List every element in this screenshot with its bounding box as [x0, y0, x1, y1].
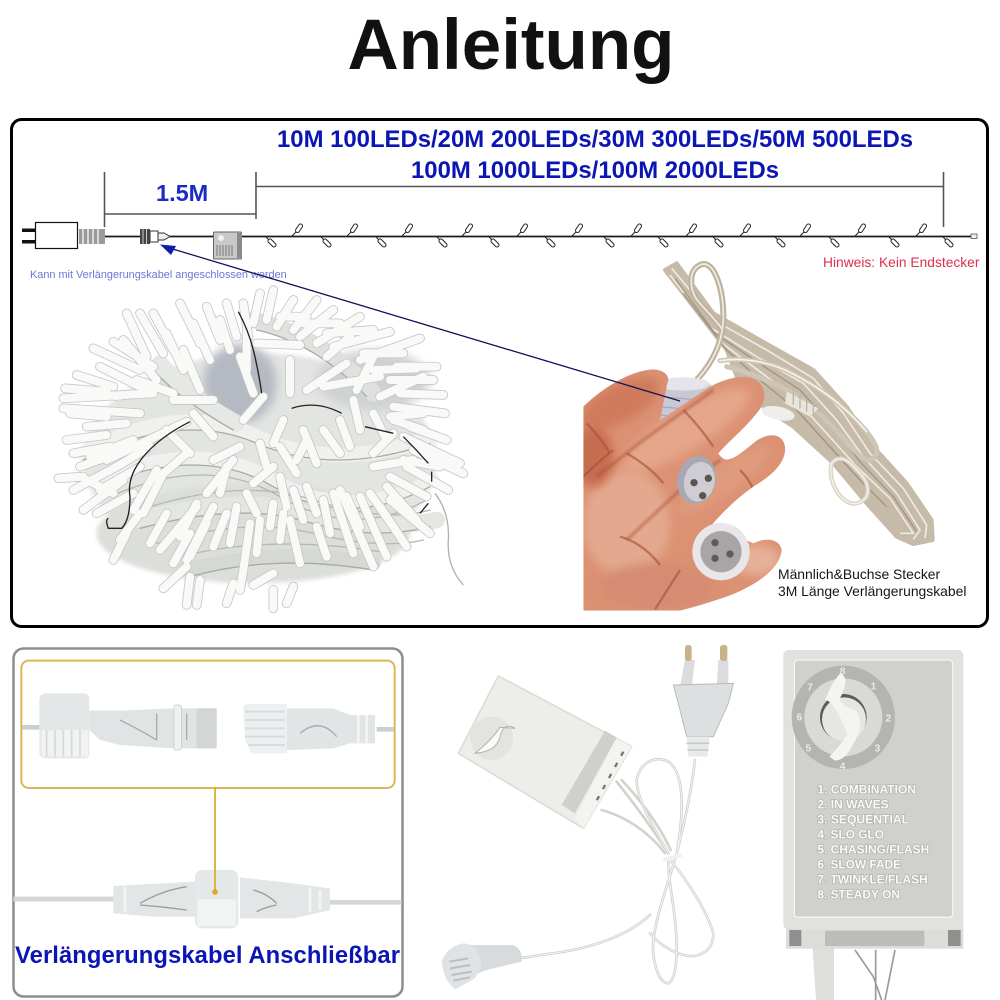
caption: extension cable photo: Männlich&Buchse Stecker [778, 566, 941, 582]
dial: 8 [840, 666, 846, 677]
rear connector [658, 380, 712, 427]
male connector [470, 945, 522, 977]
dimension: 1.5M lead [104, 172, 256, 227]
dimension: lit length [256, 172, 944, 227]
icon: inline connector [140, 229, 170, 244]
mode list: 8. STEADY ON [817, 888, 900, 901]
dial: 2 [885, 713, 891, 724]
icon: controller box [214, 232, 242, 259]
LED string diagram [105, 226, 977, 245]
loose white wire [435, 493, 463, 585]
mode list: 6. SLOW FADE [817, 858, 901, 871]
panel: wiring diagram [12, 120, 988, 626]
note: no end plug: Hinweis: Kein Endstecker [823, 255, 980, 270]
dial: 5 [805, 744, 811, 755]
dimension: 1.5M lead: 1.5M [156, 180, 208, 206]
hand [583, 370, 786, 611]
dial: 7 [807, 683, 813, 694]
photo: controller with plug [442, 645, 733, 989]
mode list [817, 783, 929, 901]
dial: 3 [874, 744, 880, 755]
dial [792, 666, 895, 772]
mode list: 4. SLO GLO [817, 828, 884, 841]
caption: extension cable photo [778, 566, 966, 599]
label: extension connectable: Verlängerungskabel Anschließbar [15, 942, 400, 969]
heading: LED length options: 10M 100LEDs/20M 200LEDs/30M 300LEDs/50M 500LEDs [277, 126, 913, 153]
inset: separated connectors [21, 661, 395, 788]
dial: 6 [796, 713, 802, 724]
photo: hand with extension cable [573, 263, 933, 617]
cables [520, 759, 713, 983]
cable coil [665, 263, 933, 544]
mode list: 1. COMBINATION [817, 783, 916, 796]
photo: controller face [783, 650, 963, 1000]
pin face connector [692, 523, 750, 580]
panel: connector detail [13, 648, 403, 996]
mode list: 3. SEQUENTIAL [817, 813, 909, 826]
note: extension cable: Kann mit Verlängerungskabel angeschlossen werden [30, 269, 287, 281]
title: Anleitung [348, 6, 674, 85]
caption: extension cable photo: 3M Länge Verlängerungskabel [778, 583, 966, 599]
heading: LED length options [277, 126, 913, 184]
euro plug [680, 660, 728, 687]
mode list: 5. CHASING/FLASH [817, 843, 929, 856]
black wire pieces [107, 312, 432, 528]
socket face connector [673, 453, 721, 507]
connector photo: joined [13, 870, 402, 928]
icon: power plug [22, 222, 105, 248]
dial: 4 [840, 761, 846, 772]
arrow: connector callout [160, 244, 680, 401]
photo: LED cluster bundle [58, 290, 463, 608]
mode list: 7. TWINKLE/FLASH [817, 873, 928, 886]
heading: LED length options: 100M 1000LEDs/100M 2000LEDs [411, 157, 779, 184]
connector leader line [212, 788, 218, 895]
mode list: 2. IN WAVES [817, 798, 889, 811]
controller body [458, 676, 632, 828]
dial: 1 [870, 681, 876, 692]
